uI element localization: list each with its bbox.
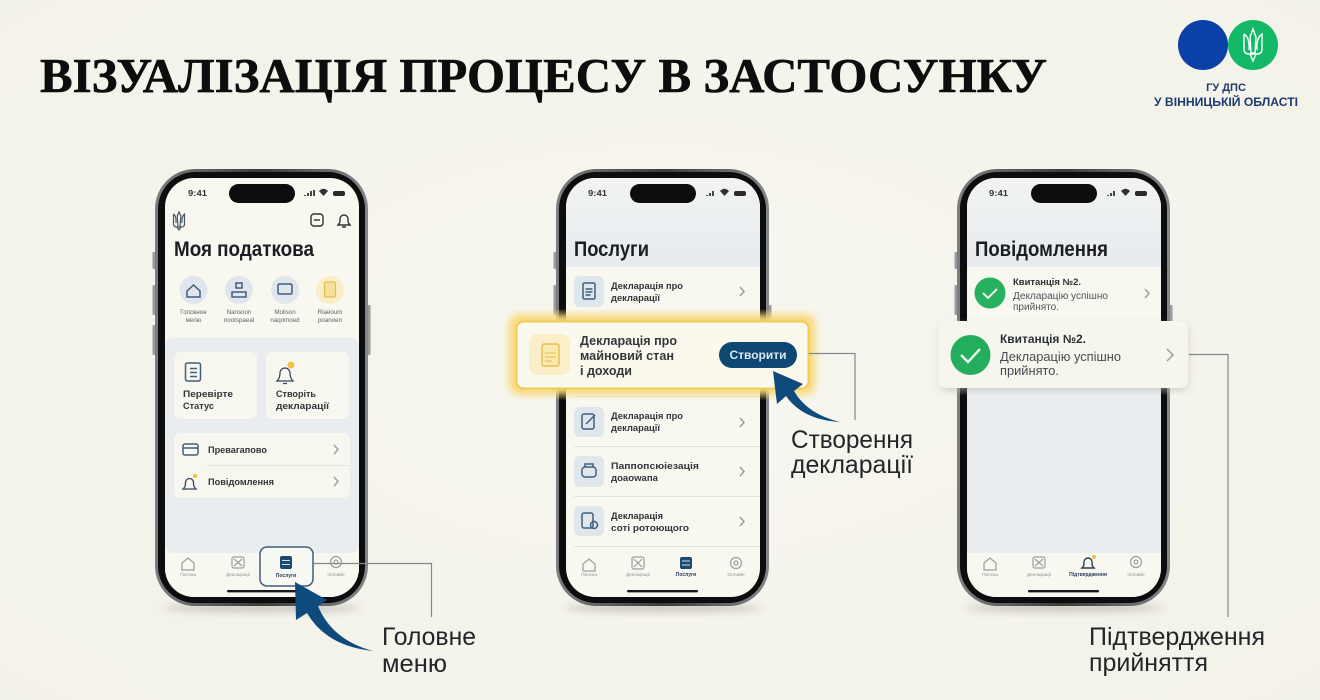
heading: Повідомлення: Повідомлення <box>975 238 1108 261</box>
nav bar: Декларації <box>626 572 651 578</box>
quick actions row: Гопсвное <box>180 309 207 316</box>
quick actions row: poanoen <box>318 317 343 324</box>
quick actions row <box>180 276 344 324</box>
highlighted card: create declaration: і доходи <box>580 363 632 378</box>
label: Підтвердження прийняття: Підтвердження <box>1089 623 1265 651</box>
nav bar: Декларації <box>226 572 251 578</box>
phone 3: Повідомлення <box>954 169 1172 612</box>
status bar: 9:41 <box>989 188 1008 198</box>
nav bar <box>982 555 1145 578</box>
nav bar: Підтвердження <box>1069 572 1107 578</box>
status bar: 9:41 <box>188 188 207 198</box>
service rows: Декларація про <box>611 281 684 291</box>
label: Підтвердження прийняття: прийняття <box>1089 649 1208 677</box>
highlighted card: create declaration: Декларація про <box>580 333 677 348</box>
list: Превагапово and Повідомлення <box>174 433 350 498</box>
cards: status and create: Створіть <box>276 389 316 400</box>
connector: menu callout line <box>313 564 432 617</box>
quick actions row: nootspaeal <box>224 317 254 324</box>
icon: trident <box>174 212 184 230</box>
label: Створення декларації: Створення <box>791 426 913 454</box>
service rows: Декларація про <box>611 411 684 421</box>
list: Превагапово and Повідомлення: Повідомлення <box>208 477 274 488</box>
nav: selected Послуги: Послуги <box>276 573 296 579</box>
highlighted card: receipt confirmation <box>938 321 1188 391</box>
nav bar: Послуги <box>676 572 696 578</box>
service rows: соті ротоющого <box>611 523 690 533</box>
logo: ГУ ДПС у Вінницькій області: У ВІННИЦЬКІЙ ОБЛАСТІ <box>1154 96 1298 109</box>
label: Створення декларації <box>791 426 913 479</box>
highlighted card: receipt confirmation: Квитанція №2. <box>1000 332 1086 346</box>
nav bar <box>180 556 345 578</box>
quick actions row: naqomoed <box>270 317 300 324</box>
status bar: 9:41 <box>588 188 607 198</box>
label: Головне меню: меню <box>382 650 447 678</box>
nav bar: Пачска <box>982 572 998 578</box>
connector: create callout line <box>809 354 855 420</box>
highlighted card: receipt confirmation: Декларацію успішно <box>1000 349 1121 364</box>
status bar <box>989 184 1147 203</box>
notification row: прийнято. <box>1013 302 1059 313</box>
quick actions row: Nansoon <box>227 309 252 316</box>
service rows: доаоwапа <box>611 473 659 483</box>
nav bar: Пачска <box>180 572 196 578</box>
highlighted card: create declaration <box>509 314 815 395</box>
cards: status and create: Перевірте <box>183 389 233 400</box>
nav bar: Декларації <box>1027 572 1052 578</box>
nav: selected Послуги <box>260 547 313 586</box>
service rows: декларації <box>611 293 660 303</box>
quick actions row: Molison <box>274 309 296 316</box>
quick actions row: мепю <box>186 317 202 324</box>
service rows <box>574 276 760 546</box>
label: Головне меню <box>382 623 476 678</box>
cards: status and create <box>174 352 349 419</box>
title: ВІЗУАЛІЗАЦІЯ ПРОЦЕСУ В ЗАСТОСУНКУ <box>40 48 1047 103</box>
heading: Послуги: Послуги <box>574 238 649 261</box>
logo: ГУ ДПС у Вінницькій області: ГУ ДПС <box>1206 82 1246 94</box>
highlighted card: receipt confirmation: прийнято. <box>1000 363 1059 378</box>
status bar <box>188 184 345 203</box>
service rows: декларації <box>611 423 660 433</box>
button: Створити <box>719 342 797 368</box>
phone 2: Послуги <box>554 169 772 612</box>
label: Головне меню: Головне <box>382 623 476 651</box>
heading: Моя податкова: Моя податкова <box>174 238 314 261</box>
button: Створити: Створити <box>730 350 786 362</box>
notification row: Декларацію успішно <box>1013 291 1108 302</box>
quick actions row: Riaeoum <box>318 309 342 316</box>
notification row <box>974 277 1149 313</box>
status bar <box>588 184 746 203</box>
phone 1: Моя податкова <box>152 169 370 612</box>
arrow: to button <box>773 371 840 422</box>
nav bar: Онлайн <box>1127 571 1145 578</box>
label: Створення декларації: декларації <box>791 451 913 479</box>
cards: status and create: декларації <box>276 401 329 412</box>
notification row: Квитанція №2. <box>1013 277 1081 287</box>
service rows: Паппопсюіезація <box>611 461 699 471</box>
nav bar: Пачска <box>581 572 597 578</box>
highlighted card: create declaration: майновий стан <box>580 348 674 363</box>
list: Превагапово and Повідомлення: Превагапово <box>208 445 267 456</box>
service rows: Декларація <box>611 511 663 521</box>
arrow: to menu <box>295 582 373 651</box>
logo: ГУ ДПС у Вінницькій області <box>1154 20 1298 109</box>
cards: status and create: Статус <box>183 401 214 412</box>
icon: scan and bell <box>311 214 350 227</box>
nav bar <box>581 557 745 578</box>
nav bar: Онлайн <box>327 571 345 578</box>
label: Підтвердження прийняття <box>1089 623 1265 677</box>
nav bar: Онлайн <box>727 571 745 578</box>
connector: confirmation callout line <box>1189 354 1228 617</box>
